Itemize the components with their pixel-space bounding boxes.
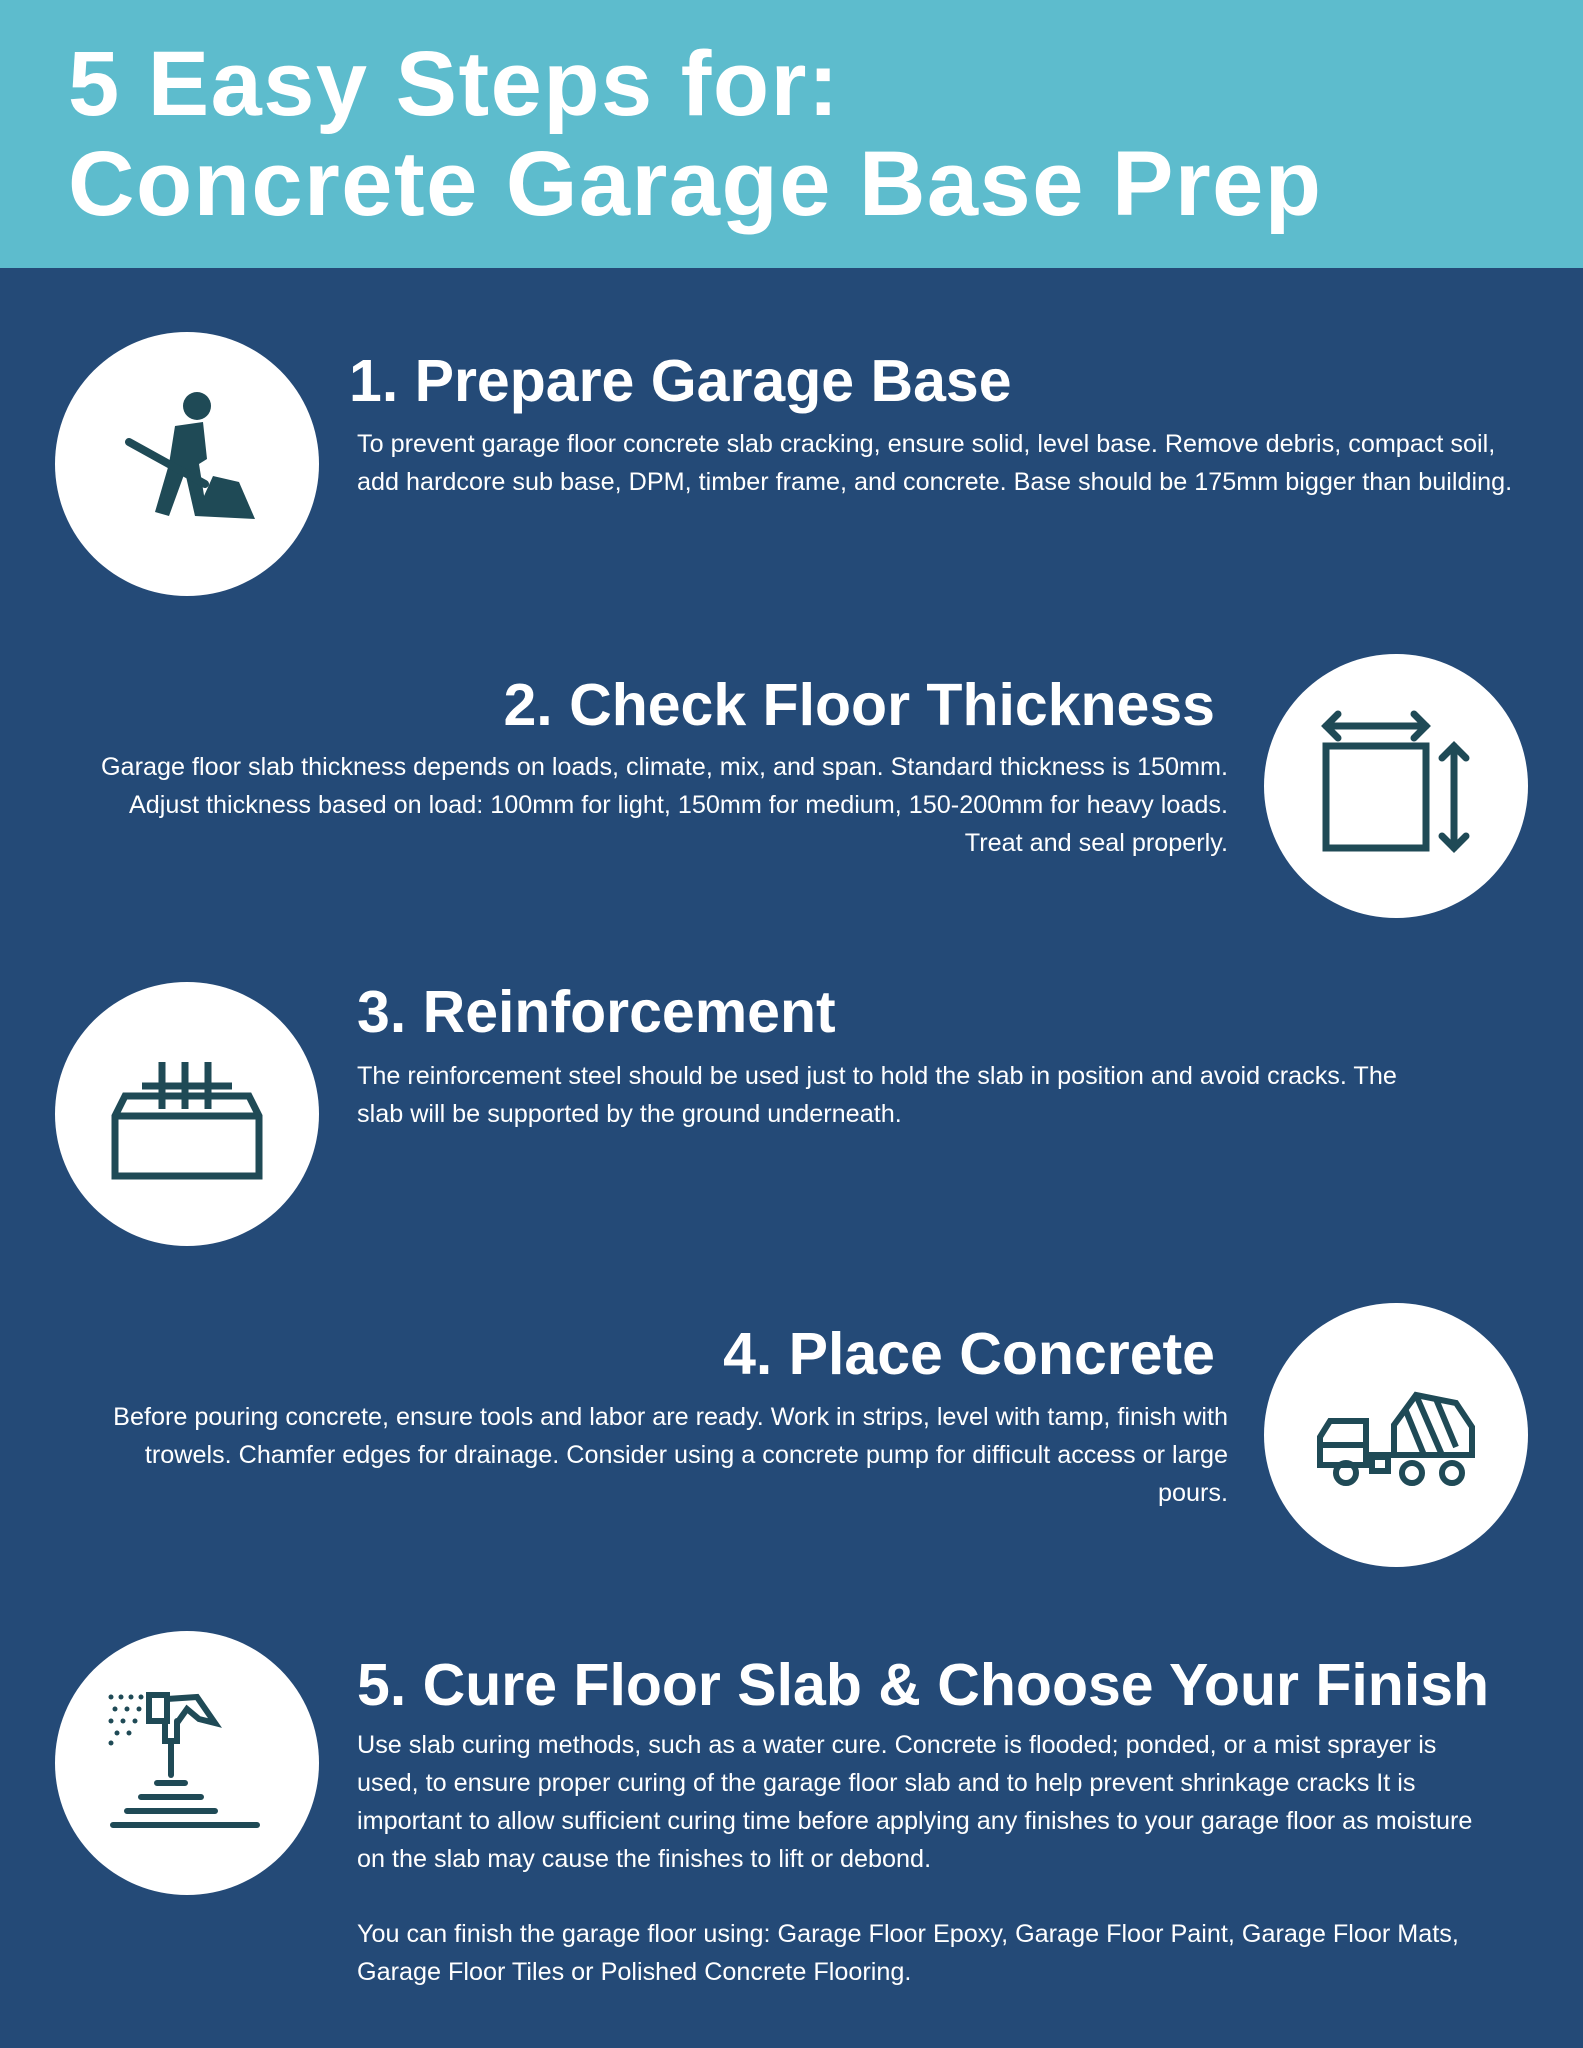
icon: reinforcement box	[55, 982, 319, 1246]
step 4 text: trowels. Chamfer edges for drainage. Consider using a concrete pump for difficult access or large	[145, 1441, 1228, 1469]
step 5 text: used, to ensure proper curing of the garage floor slab and to help prevent shrinkage cracks It is	[357, 1769, 1416, 1797]
step 1 text	[357, 430, 1512, 496]
step 3 heading: 3. Reinforcement	[357, 979, 836, 1045]
step 2 text: Garage floor slab thickness depends on loads, climate, mix, and span. Standard thickness is 150mm.	[101, 753, 1228, 781]
step 5 heading: 5. Cure Floor Slab & Choose Your Finish	[357, 1652, 1489, 1718]
step 1 heading: 1. Prepare Garage Base	[349, 348, 1012, 414]
step 3 text: The reinforcement steel should be used just to hold the slab in position and avoid cracks. The	[357, 1062, 1397, 1090]
header band	[0, 0, 1583, 268]
step 4 text: pours.	[1158, 1479, 1228, 1507]
step 5 finishes text: You can finish the garage floor using: Garage Floor Epoxy, Garage Floor Paint, Garage Floor Mats,	[357, 1920, 1459, 1948]
step 2 text	[101, 753, 1228, 857]
step 4 heading: 4. Place Concrete	[723, 1321, 1215, 1387]
title	[68, 33, 1322, 235]
step 2 text: Adjust thickness based on load: 100mm for light, 150mm for medium, 150-200mm for heavy loads.	[129, 791, 1228, 819]
title: Concrete Garage Base Prep	[68, 133, 1322, 235]
step 3 text: slab will be supported by the ground underneath.	[357, 1100, 902, 1128]
step 1 text: add hardcore sub base, DPM, timber frame, and concrete. Base should be 175mm bigger than building.	[357, 468, 1512, 496]
title: 5 Easy Steps for:	[68, 33, 840, 135]
step 2 text: Treat and seal properly.	[965, 829, 1228, 857]
step 5 finishes text: Garage Floor Tiles or Polished Concrete Flooring.	[357, 1958, 911, 1986]
icon: concrete mixer truck	[1264, 1303, 1528, 1567]
step 3 text	[357, 1062, 1397, 1128]
step 5 text	[357, 1731, 1472, 1873]
step 4 text	[113, 1403, 1228, 1507]
step 5 text: important to allow sufficient curing time before applying any finishes to your garage floor as moisture	[357, 1807, 1472, 1835]
step 5 text: Use slab curing methods, such as a water cure. Concrete is flooded; ponded, or a mist sprayer is	[357, 1731, 1436, 1759]
step 5 finishes text	[357, 1920, 1459, 1986]
step 1 text: To prevent garage floor concrete slab cracking, ensure solid, level base. Remove debris, compact soil,	[357, 430, 1495, 458]
step 2 heading: 2. Check Floor Thickness	[503, 672, 1215, 738]
step 4 text: Before pouring concrete, ensure tools and labor are ready. Work in strips, level with tamp, finish with	[113, 1403, 1228, 1431]
icon: thickness	[1264, 654, 1528, 918]
icon: hose sprayer	[55, 1631, 319, 1895]
step 5 text: on the slab may cause the finishes to lift or debond.	[357, 1845, 931, 1873]
icon: worker shoveling	[55, 332, 319, 596]
